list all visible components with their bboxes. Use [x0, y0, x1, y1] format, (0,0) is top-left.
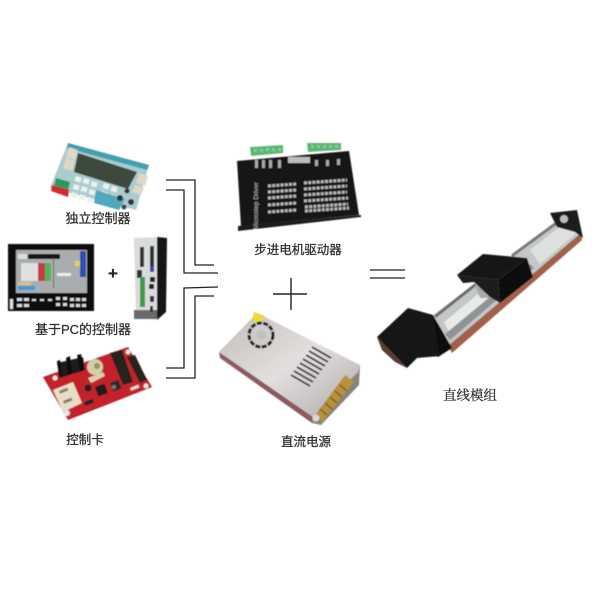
motor flange plate — [415, 315, 452, 357]
carriage — [457, 254, 527, 280]
icon: touch-screen monitor — [8, 244, 94, 311]
label: DC power supply: 直流电源 — [281, 435, 331, 449]
icon: DC power supply — [219, 312, 360, 425]
icon: large plus — [273, 278, 307, 310]
icon: linear module — [377, 210, 583, 368]
far end plate — [550, 210, 583, 238]
connector lines: controllers to driver and power — [166, 180, 218, 378]
icon: small plus: + — [108, 264, 118, 283]
rail body — [433, 215, 582, 350]
ball screw — [436, 219, 562, 316]
label: linear module: 直线模组 — [443, 387, 497, 403]
label: standalone controller: 独立控制器 — [65, 211, 131, 226]
icon: stepper motor driver — [237, 143, 361, 231]
ball nut — [473, 280, 497, 298]
label: PC-based controller: 基于PC的控制器 — [35, 322, 131, 337]
icon: red control card — [43, 347, 152, 420]
icon: PC controller box — [134, 237, 167, 320]
motor — [377, 308, 440, 368]
label: control card: 控制卡 — [66, 433, 104, 447]
driver nameplate: Microstep Driver — [253, 182, 260, 230]
label: stepper driver: 步进电机驱动器 — [254, 243, 342, 257]
icon: equals sign — [370, 270, 405, 278]
icon: standalone controller — [50, 143, 149, 210]
